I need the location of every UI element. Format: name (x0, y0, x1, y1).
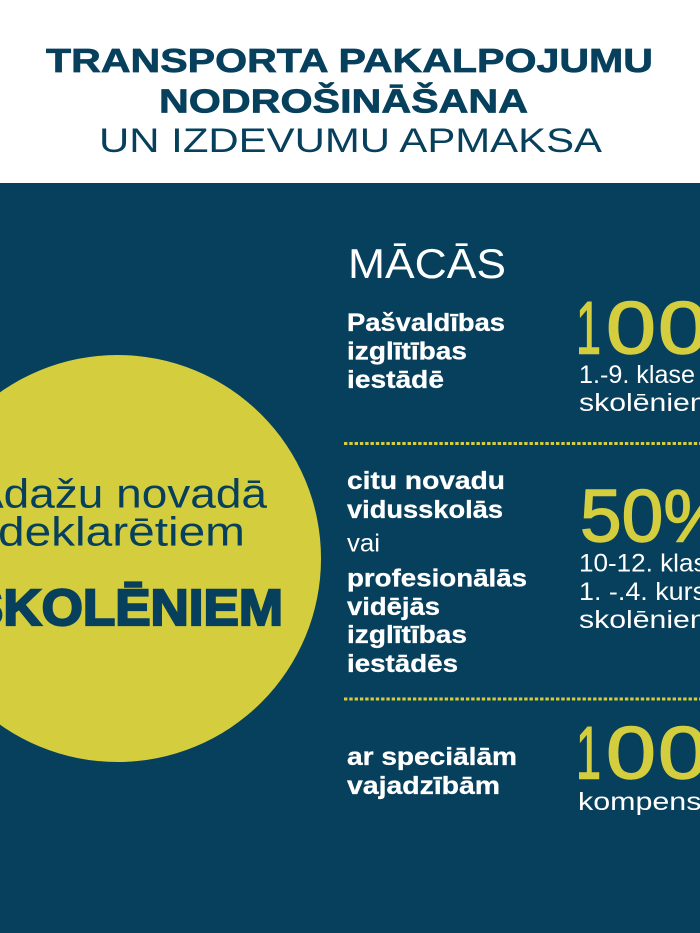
row 2 label: izglītības (347, 621, 467, 649)
row 3 label (347, 743, 517, 800)
row 3 percentage: 0 (606, 712, 656, 794)
row 1 note: skolēniem (579, 389, 700, 417)
circle text: intro (0, 470, 267, 554)
row 2 label: citu novadu (347, 467, 505, 495)
row 1 percentage (576, 286, 700, 370)
row 2 label: vai (347, 530, 380, 558)
row 3: special needs (347, 712, 700, 816)
row 1: municipal schools (347, 286, 700, 417)
row 2 label: vidējās (347, 593, 440, 621)
row 2 label: profesionālās (347, 564, 527, 592)
row 3 label: ar speciālām (347, 743, 517, 771)
title (46, 43, 653, 160)
row 1 label (347, 309, 505, 394)
row 2: other schools (347, 467, 700, 678)
row 1 percentage: 0 (658, 286, 700, 370)
row 2 note: skolēniem (579, 606, 700, 634)
row 1 percentage: 1 (576, 286, 601, 370)
title: UN IZDEVUMU APMAKSA (99, 122, 602, 160)
panel: white header background (0, 0, 700, 183)
title: NODROŠINĀŠANA (159, 82, 528, 120)
row 1 note (579, 361, 700, 417)
row 2 label: iestādēs (347, 650, 458, 678)
row 1 percentage: 0 (606, 286, 656, 370)
heading: studies: MĀCĀS (348, 240, 506, 287)
row 3 label: vajadzībām (347, 772, 500, 800)
row 3 percentage (576, 712, 700, 794)
row 1 label: izglītības (347, 338, 467, 366)
row 2 note (579, 550, 700, 634)
row 3 percentage: 0 (658, 712, 700, 794)
row 2 label (347, 467, 527, 678)
title: TRANSPORTA PAKALPOJUMU (46, 43, 653, 80)
row 1 label: Pašvaldības (347, 309, 505, 337)
row 1 label: iestādē (347, 366, 444, 394)
row 3 percentage: 1 (576, 712, 601, 794)
row 1 note: 1.-9. klase (579, 361, 695, 389)
row 2 label: vidusskolās (347, 496, 503, 524)
circle text: intro: deklarētiem (0, 508, 245, 554)
panel: yellow circle (0, 355, 321, 762)
